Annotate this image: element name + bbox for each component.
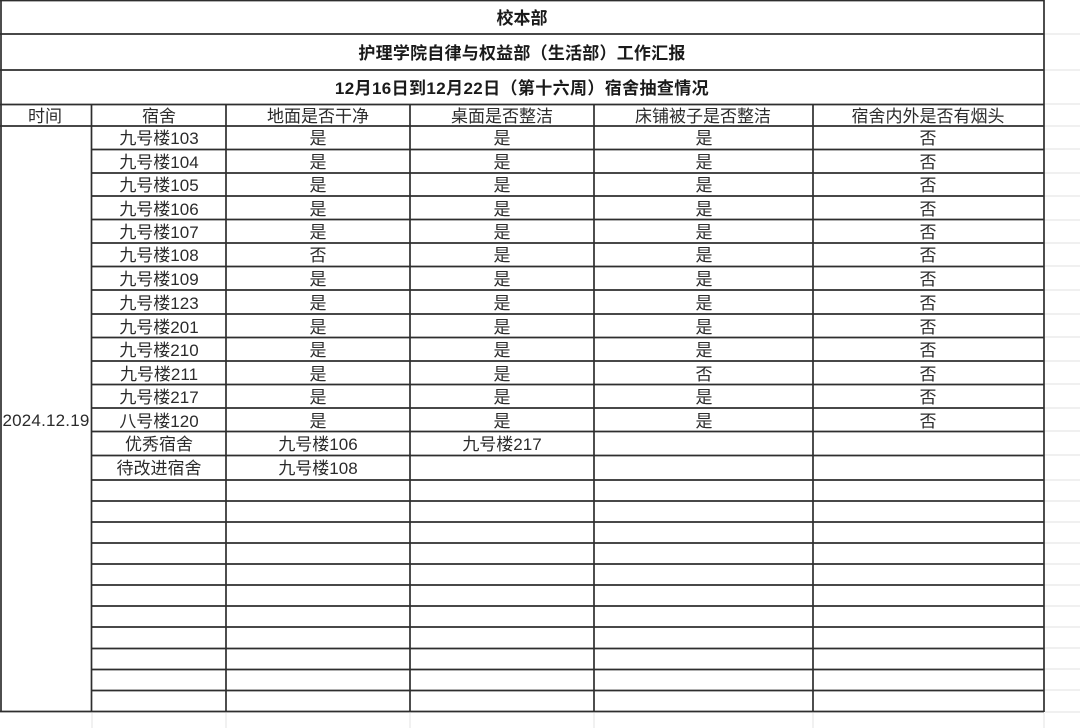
column: cigarette butts: 否 xyxy=(920,153,936,172)
column: cigarette butts xyxy=(920,129,936,431)
column: floor clean: 是 xyxy=(310,270,326,289)
column: desk tidy: 是 xyxy=(494,318,510,337)
column: desk tidy: 是 xyxy=(494,129,510,148)
column: desk tidy xyxy=(462,129,542,454)
column: cigarette butts: 否 xyxy=(920,388,936,407)
column: bedding tidy: 是 xyxy=(696,129,712,148)
column: cigarette butts: 否 xyxy=(920,176,936,195)
column: cigarette butts: 否 xyxy=(920,294,936,313)
column: dormitory names: 九号楼107 xyxy=(119,223,199,242)
table header row: 地面是否干净 xyxy=(267,107,369,126)
heading: inspection period: 12月16日到12月22日（第十六周）宿舍抽查情况 xyxy=(335,78,709,98)
column: bedding tidy: 是 xyxy=(696,153,712,172)
column: dormitory names: 九号楼103 xyxy=(119,129,199,148)
column: dormitory names: 九号楼105 xyxy=(119,176,199,195)
column: dormitory names: 九号楼217 xyxy=(119,388,199,407)
table header row: 床铺被子是否整洁 xyxy=(635,107,771,126)
column: cigarette butts: 否 xyxy=(920,341,936,360)
column: floor clean: 是 xyxy=(310,200,326,219)
column: desk tidy: 是 xyxy=(494,153,510,172)
column: bedding tidy: 是 xyxy=(696,341,712,360)
column: bedding tidy: 是 xyxy=(696,388,712,407)
column: cigarette butts: 否 xyxy=(920,412,936,431)
column: cigarette butts: 否 xyxy=(920,129,936,148)
column: floor clean: 是 xyxy=(310,153,326,172)
column: dormitory names: 九号楼210 xyxy=(119,341,199,360)
column: dormitory names: 八号楼120 xyxy=(119,412,199,431)
column: desk tidy: 九号楼217 xyxy=(462,435,542,454)
column: floor clean: 否 xyxy=(310,246,326,265)
column: cigarette butts: 否 xyxy=(920,318,936,337)
column: floor clean: 是 xyxy=(310,129,326,148)
column: floor clean: 是 xyxy=(310,365,326,384)
column: floor clean: 是 xyxy=(310,176,326,195)
column: desk tidy: 是 xyxy=(494,365,510,384)
column: floor clean: 是 xyxy=(310,223,326,242)
column: dormitory names xyxy=(116,129,202,478)
column: dormitory names: 九号楼106 xyxy=(119,200,199,219)
column: dormitory names: 九号楼109 xyxy=(119,270,199,289)
column: dormitory names: 九号楼123 xyxy=(119,294,199,313)
column: floor clean: 九号楼106 xyxy=(278,435,358,454)
table header row: 宿舍 xyxy=(142,107,176,126)
column: cigarette butts: 否 xyxy=(920,200,936,219)
column: floor clean: 九号楼108 xyxy=(278,459,358,478)
column: bedding tidy: 是 xyxy=(696,246,712,265)
column: desk tidy: 是 xyxy=(494,294,510,313)
column: bedding tidy: 是 xyxy=(696,200,712,219)
column: dormitory names: 九号楼104 xyxy=(119,153,199,172)
table header row: 宿舍内外是否有烟头 xyxy=(852,107,1004,126)
column: bedding tidy: 是 xyxy=(696,270,712,289)
column: floor clean: 是 xyxy=(310,318,326,337)
column: desk tidy: 是 xyxy=(494,176,510,195)
column: cigarette butts: 否 xyxy=(920,223,936,242)
column: floor clean: 是 xyxy=(310,388,326,407)
column: desk tidy: 是 xyxy=(494,270,510,289)
column: bedding tidy xyxy=(696,129,712,431)
column: desk tidy: 是 xyxy=(494,341,510,360)
column: dormitory names: 待改进宿舍 xyxy=(116,459,202,478)
column: dormitory names: 优秀宿舍 xyxy=(125,435,193,454)
table header row: 时间 xyxy=(28,107,62,126)
column: cigarette butts: 否 xyxy=(920,365,936,384)
column: floor clean: 是 xyxy=(310,341,326,360)
column: dormitory names: 九号楼201 xyxy=(119,318,199,337)
column: bedding tidy: 是 xyxy=(696,223,712,242)
title: campus: 校本部 xyxy=(496,8,548,28)
column: bedding tidy: 否 xyxy=(696,365,712,384)
column: desk tidy: 是 xyxy=(494,246,510,265)
date cell: 2024.12.19 xyxy=(2,411,90,430)
column: dormitory names: 九号楼211 xyxy=(120,365,198,384)
column: dormitory names: 九号楼108 xyxy=(119,246,199,265)
heading: work report: 护理学院自律与权益部（生活部）工作汇报 xyxy=(358,43,686,63)
table header row: 桌面是否整洁 xyxy=(451,107,553,126)
column: floor clean: 是 xyxy=(310,412,326,431)
column: cigarette butts: 否 xyxy=(920,270,936,289)
column: desk tidy: 是 xyxy=(494,388,510,407)
column: desk tidy: 是 xyxy=(494,412,510,431)
column: desk tidy: 是 xyxy=(494,223,510,242)
column: desk tidy: 是 xyxy=(494,200,510,219)
column: bedding tidy: 是 xyxy=(696,294,712,313)
table header row xyxy=(28,107,1004,126)
column: floor clean xyxy=(278,129,358,478)
column: bedding tidy: 是 xyxy=(696,412,712,431)
column: bedding tidy: 是 xyxy=(696,176,712,195)
column: bedding tidy: 是 xyxy=(696,318,712,337)
column: floor clean: 是 xyxy=(310,294,326,313)
column: cigarette butts: 否 xyxy=(920,246,936,265)
